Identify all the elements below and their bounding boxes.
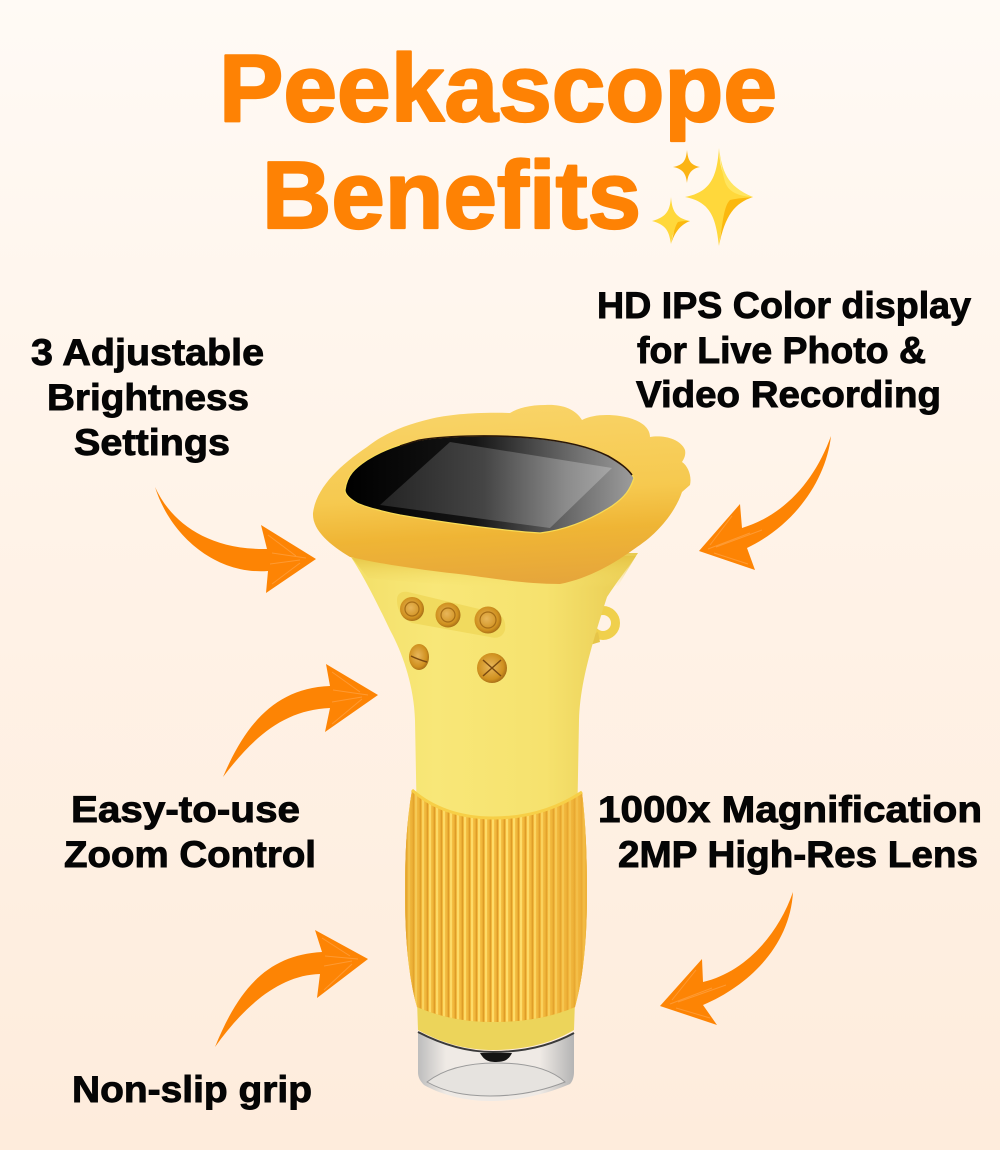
label: brightness settings: 3 Adjustable — [31, 332, 264, 373]
ribbed grip ring — [400, 785, 595, 1025]
arrow: to zoom control — [223, 664, 378, 777]
label: zoom control: Zoom Control — [64, 834, 316, 875]
label: grip: Non-slip grip — [72, 1069, 312, 1110]
arrow: to display — [699, 436, 831, 570]
lower body — [417, 1000, 575, 1050]
shadow under rim — [352, 556, 636, 587]
icon: sparkles — [652, 148, 753, 246]
label: brightness settings: Settings — [74, 422, 230, 463]
title: Benefits — [262, 142, 641, 249]
label: brightness settings — [31, 332, 264, 463]
control buttons — [397, 592, 507, 683]
arrow: to brightness buttons — [155, 487, 316, 593]
label: magnification: 1000x Magnification — [598, 789, 982, 830]
label: zoom control — [64, 789, 316, 875]
label: display: HD IPS Color display — [597, 285, 971, 326]
screen rim — [313, 405, 691, 584]
title — [219, 35, 777, 249]
label: zoom control: Easy-to-use — [71, 789, 300, 830]
arrow: to lens — [660, 892, 793, 1025]
arrow: to grip — [215, 930, 368, 1047]
strap loop — [570, 610, 616, 650]
lens cover — [418, 1032, 574, 1101]
label: magnification — [598, 789, 982, 875]
upper body — [348, 553, 638, 830]
label: magnification: 2MP High-Res Lens — [618, 834, 978, 875]
label: brightness settings: Brightness — [47, 377, 249, 418]
title: Peekascope — [219, 35, 777, 142]
label: display: Video Recording — [636, 374, 941, 415]
label: display — [597, 285, 971, 415]
product: Peekascope microscope — [313, 405, 691, 1101]
screen — [345, 436, 634, 533]
label: display: for Live Photo & — [637, 330, 926, 371]
